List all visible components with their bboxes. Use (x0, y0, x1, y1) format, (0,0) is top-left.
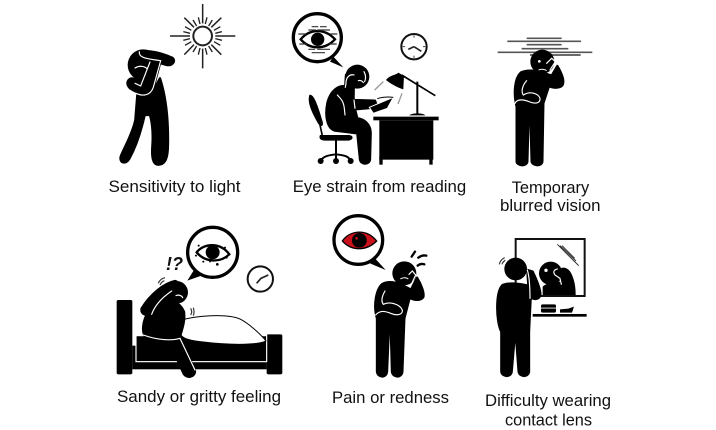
icon: sun (170, 4, 235, 68)
panel: temporary blurred vision (498, 38, 600, 215)
label: difficulty wearing contact lens: contact lens (505, 410, 592, 430)
icon: person holding eye (375, 261, 424, 376)
label: eye strain: Eye strain from reading (293, 177, 466, 196)
icon: shelf with lens case (533, 304, 587, 317)
label: difficulty wearing contact lens (485, 391, 611, 430)
label: temporary blurred vision: Temporary (512, 178, 590, 197)
label: sandy or gritty: Sandy or gritty feeling (117, 387, 281, 406)
icon: bed (117, 300, 282, 374)
label: sensitivity to light: Sensitivity to light (108, 177, 241, 196)
icon: person shielding eyes (120, 49, 174, 165)
label: temporary blurred vision (500, 178, 600, 215)
icon: wall clock (401, 34, 427, 59)
icon: mirror with reflection (516, 239, 585, 296)
icon: eye speech bubble (293, 14, 343, 67)
label: difficulty wearing contact lens: Difficulty wearing (485, 391, 611, 410)
icon: person sitting on bed (141, 278, 195, 377)
panel: sensitivity to light (108, 4, 241, 196)
icon: eye speech bubble (187, 227, 238, 281)
icon: interrobang mark: !? (166, 254, 183, 274)
panel: sandy or gritty feeling (117, 227, 282, 406)
panel: difficulty wearing contact lens (485, 239, 611, 430)
label: temporary blurred vision: blurred vision (500, 196, 600, 215)
icon: pain marks (412, 252, 426, 266)
icon: chair (309, 95, 354, 164)
icon: blur lines (498, 38, 592, 55)
icon: person at mirror (497, 258, 540, 376)
label: pain or redness: Pain or redness (332, 388, 449, 407)
icon: wall clock (248, 266, 273, 292)
icon: red eye speech bubble (334, 216, 386, 270)
panel: eye strain from reading (293, 14, 466, 196)
panel: pain or redness (332, 216, 449, 407)
icon: person rubbing eye (515, 50, 563, 165)
icon: person reading (326, 65, 393, 164)
icon: desk with lamp (373, 73, 439, 165)
